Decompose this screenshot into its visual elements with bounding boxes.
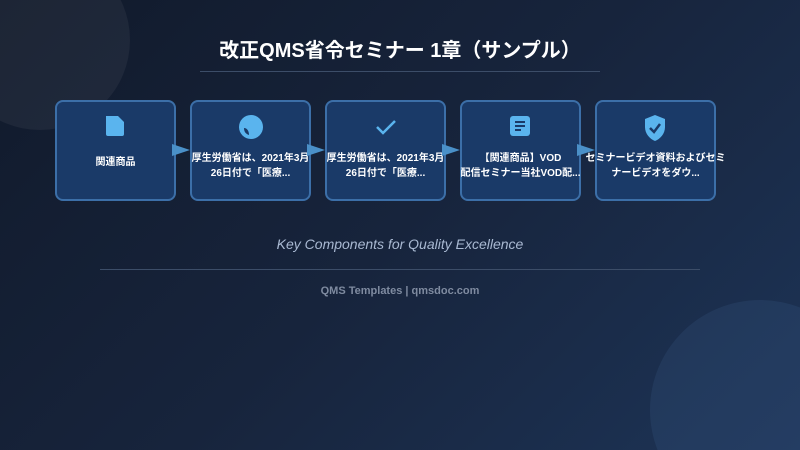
card 2: 26日付で「医療... xyxy=(211,168,290,179)
subtitle: Key Components for Quality Excellence xyxy=(277,236,523,252)
card 5 xyxy=(595,100,716,201)
card 4: 配信セミナー当社VOD配... xyxy=(460,168,580,179)
footer: QMS Templates | qmsdoc.com xyxy=(321,285,479,297)
card 3: 厚生労働省は、2021年3月 xyxy=(327,153,444,164)
icon: note xyxy=(510,116,530,136)
arrow 4 xyxy=(577,144,595,156)
arrow 1 xyxy=(172,144,190,156)
card 5: ナービデオをダウ... xyxy=(611,168,700,179)
card 4: 【関連商品】VOD xyxy=(480,153,561,164)
title: 改正QMS省令セミナー 1章（サンプル） xyxy=(219,40,581,62)
icon: shield xyxy=(645,115,665,141)
icon: check xyxy=(376,120,396,135)
icon: globe xyxy=(239,115,263,139)
card 5: セミナービデオ資料およびセミ xyxy=(586,153,726,164)
card 1: 関連商品 xyxy=(96,157,136,168)
card 2: 厚生労働省は、2021年3月 xyxy=(192,153,309,164)
card 1 xyxy=(55,100,176,201)
card 3 xyxy=(325,100,446,201)
arrow 2 xyxy=(307,144,325,156)
card 3: 26日付で「医療... xyxy=(346,168,425,179)
icon: document xyxy=(106,116,124,136)
card 2 xyxy=(190,100,311,201)
card 4 xyxy=(460,100,581,201)
arrow 3 xyxy=(442,144,460,156)
